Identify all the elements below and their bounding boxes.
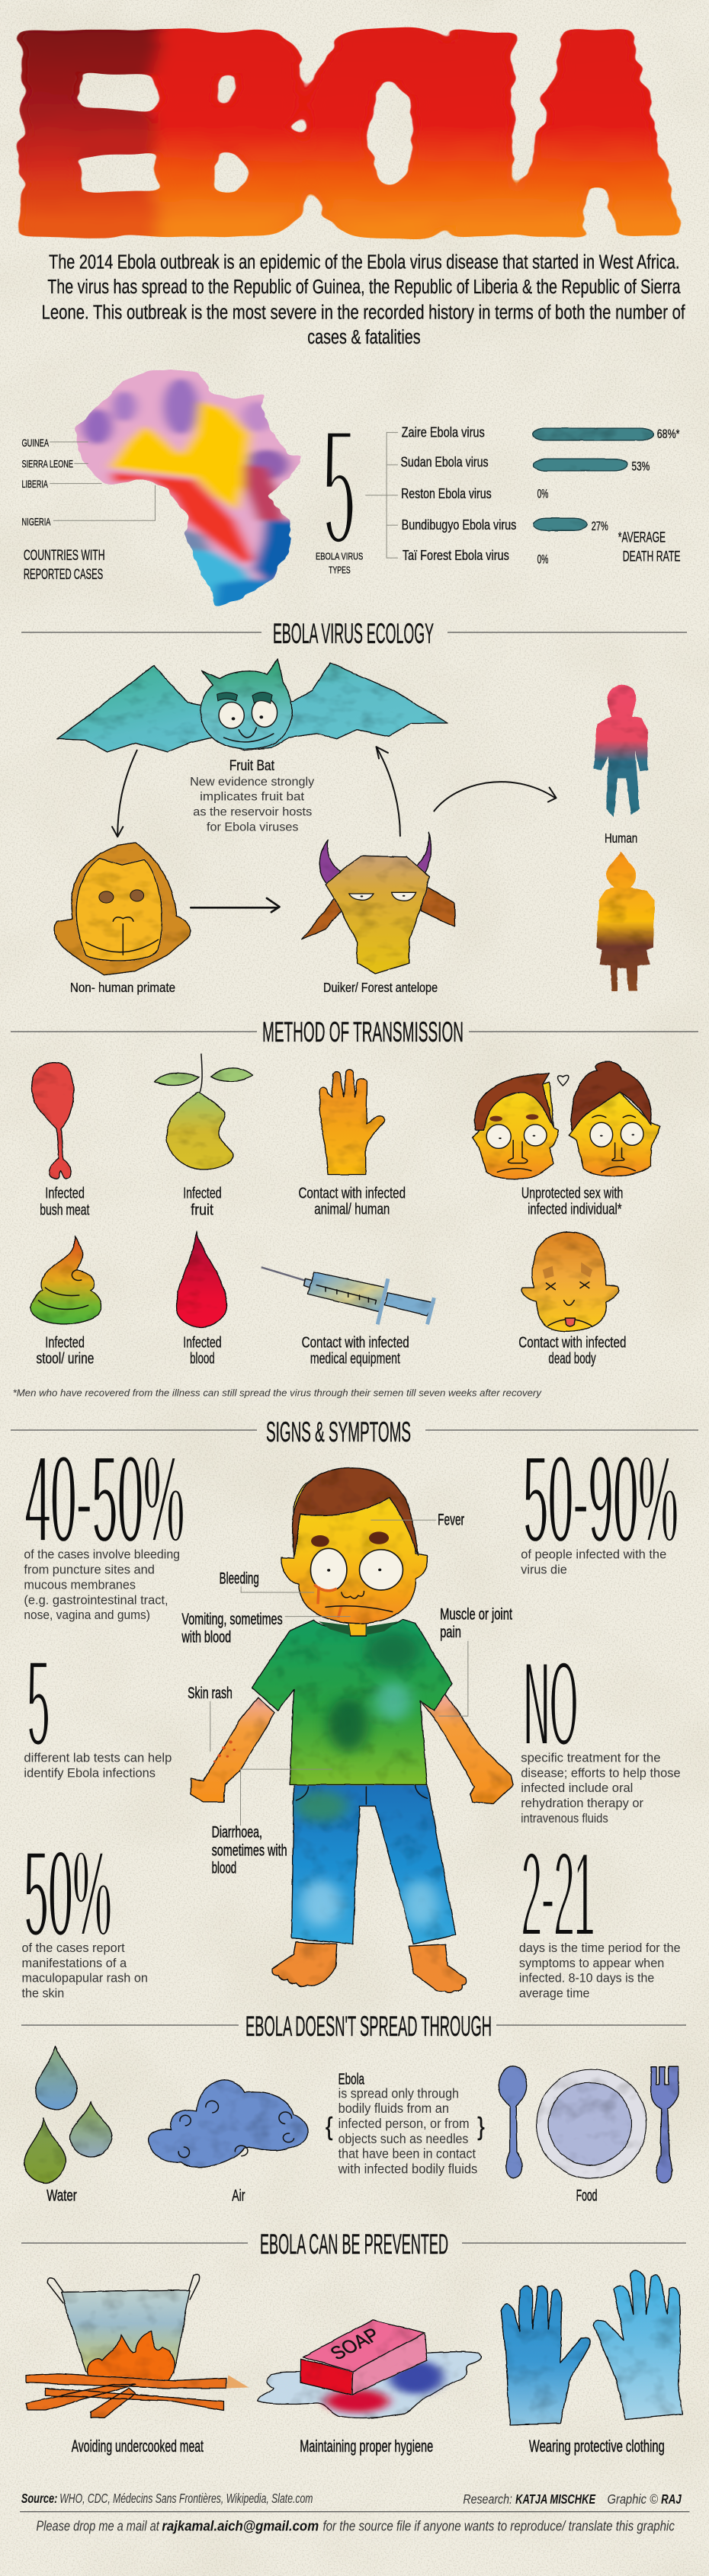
virus names: Zaire Ebola virus — [402, 424, 485, 440]
labels row one — [40, 1185, 623, 1218]
source credits: WHO, CDC, Médecins Sans Frontières, Wikipedia, Slate.com — [59, 2491, 313, 2506]
label: hygiene: Maintaining proper hygiene — [300, 2437, 433, 2456]
icon: blood drop — [176, 1231, 227, 1328]
virus names: Sudan Ebola virus — [400, 454, 489, 470]
panel: signs and symptoms — [21, 1429, 681, 2000]
icon: soap bar in puddle: SOAP — [326, 2324, 383, 2364]
icon: syringe — [261, 1267, 434, 1324]
intro text block: cases & fatalities — [307, 325, 421, 347]
heading: Ebola can be prevented: EBOLA CAN BE PREVENTED — [260, 2229, 448, 2260]
text block: how Ebola spreads: with infected bodily fluids — [338, 2162, 478, 2177]
death rate values: 53% — [632, 459, 650, 473]
big stat: 2-21 days: days is the time period for the — [519, 1940, 681, 1955]
death rate values: 27% — [592, 519, 608, 533]
icon: fruit bat — [56, 659, 448, 752]
big stat: NO treatment: disease; efforts to help those — [521, 1765, 681, 1780]
map labels and leader lines — [21, 437, 155, 528]
big stat: 50% rash: manifestations of a — [21, 1955, 127, 1970]
labels row two: Infected — [45, 1334, 85, 1351]
icon: human female figure — [596, 852, 655, 990]
virus names — [400, 424, 516, 563]
fruit bat caption — [190, 757, 315, 834]
icon: couple faces — [473, 1062, 660, 1179]
symptom callouts: sometimes with — [212, 1841, 287, 1859]
heading: method of transmission: METHOD OF TRANSMISSION — [262, 1016, 464, 1048]
source credits: RAJ — [661, 2492, 682, 2507]
symptom callouts: with blood — [181, 1627, 231, 1646]
labels row two: Infected — [183, 1334, 222, 1351]
symptom callouts — [181, 1510, 512, 1877]
big stat: 50% rash: the skin — [21, 1986, 64, 2000]
intro text block — [42, 251, 685, 347]
labels row one: Infected — [45, 1185, 85, 1202]
arrow: antelope to bat — [376, 747, 400, 836]
symptom callouts: Muscle or joint — [440, 1605, 512, 1623]
death rate values: 0% — [537, 552, 548, 566]
symptom callouts: Skin rash — [188, 1683, 233, 1701]
label: undercooked meat: Avoiding undercooked meat — [72, 2437, 204, 2456]
average death rate note — [618, 529, 681, 565]
death rate values — [537, 427, 679, 566]
panel: ecology cycle — [54, 659, 655, 995]
icon: soap bar in puddle — [258, 2320, 482, 2418]
label: air: Air — [232, 2187, 245, 2205]
icon: cloud — [149, 2080, 308, 2167]
big stat: NO treatment: specific treatment for the — [521, 1750, 661, 1765]
big stat: 40-50%: from puncture sites and — [24, 1562, 155, 1576]
text block: how Ebola spreads: infected person, or from — [338, 2117, 470, 2131]
death rate bars — [532, 428, 653, 530]
text block: how Ebola spreads: that have been in contact — [338, 2146, 476, 2162]
icon: human male figure — [594, 685, 648, 818]
source credits: Graphic © — [608, 2492, 658, 2507]
icon: bush meat — [31, 1063, 74, 1179]
panel: signs and symptoms: 50% — [24, 1824, 111, 1963]
panel: transmission icons — [13, 1054, 660, 1398]
hair — [293, 1468, 419, 1557]
panel: Africa map and virus types — [21, 370, 680, 606]
big stat: 5 lab tests: 5 — [27, 1634, 50, 1773]
big stat: 50-90%: of people infected with the — [521, 1547, 666, 1561]
label: water: Water — [47, 2187, 77, 2205]
source credits: Research: — [463, 2492, 512, 2507]
labels row two: dead body — [548, 1350, 596, 1367]
icon: non-human primate — [54, 843, 190, 975]
text block: how Ebola spreads: objects such as needles — [338, 2132, 469, 2147]
fruit bat caption: New evidence strongly — [190, 775, 315, 788]
labels row two: stool/ urine — [36, 1350, 94, 1367]
panel: signs and symptoms: 40-50% — [25, 1429, 184, 1570]
labels row one: Infected — [183, 1185, 222, 1202]
fruit bat caption: Fruit Bat — [229, 757, 274, 773]
big stat: 5 lab tests — [24, 1634, 172, 1780]
text block: how Ebola spreads — [326, 2070, 485, 2177]
panel: ecology cycle: Human — [605, 831, 637, 846]
source credits: Source: — [21, 2491, 57, 2506]
map of Africa — [75, 370, 301, 606]
map labels and leader lines: SIERRA LEONE — [21, 459, 73, 470]
panel: Africa map and virus types: Taï Forest Ebola virus — [403, 547, 509, 563]
icon: dead body face — [521, 1232, 618, 1331]
big stat: 40-50%: (e.g. gastrointestinal tract, — [24, 1592, 168, 1607]
big stat: NO treatment — [521, 1635, 681, 1826]
panel: Africa map and virus types: EBOLA VIRUS — [316, 551, 363, 562]
icon: pot over fire — [26, 2274, 249, 2418]
text block: how Ebola spreads: } — [477, 2112, 485, 2140]
big stat: NO treatment: infected include oral — [521, 1781, 633, 1795]
labels row one: animal/ human — [314, 1201, 390, 1218]
big stat: NO treatment: intravenous fluids — [521, 1810, 608, 1826]
arrow: primate to antelope — [191, 898, 280, 912]
labels row two: blood — [190, 1350, 215, 1367]
big stat: NO treatment: rehydration therapy or — [521, 1795, 643, 1810]
big number 5: virus types — [316, 392, 363, 581]
big stat: 50% rash — [21, 1824, 148, 2000]
big stat: 40-50%: of the cases involve bleeding — [24, 1547, 180, 1561]
panel: ecology cycle: Duiker/ Forest antelope — [323, 981, 438, 995]
icon: infected fruit — [155, 1054, 253, 1170]
symptom callouts: blood — [212, 1858, 236, 1877]
text block: how Ebola spreads: { — [326, 2112, 333, 2140]
contact note: rajkamal.aich@gmail.com — [162, 2518, 319, 2534]
contact note — [36, 2518, 675, 2534]
labels row two: medical equipment — [310, 1350, 400, 1367]
big stat: 2-21 days — [519, 1826, 681, 2000]
big stat: 2-21 days: average time — [519, 1986, 589, 2000]
labels row two — [36, 1334, 626, 1367]
big stat: 50% rash: maculopapular rash on — [21, 1970, 148, 1985]
icon: duiker antelope — [302, 832, 455, 974]
fruit bat caption: for Ebola viruses — [207, 820, 298, 834]
panel: spread and prevention: Food — [576, 2187, 597, 2205]
panel: Africa map and virus types: Bundibugyo Ebola virus — [402, 517, 516, 533]
text block: how Ebola spreads: is spread only through — [338, 2086, 459, 2101]
labels: primate and antelope: Non- human primate — [70, 981, 175, 995]
big stat: 5 lab tests: different lab tests can help — [24, 1750, 172, 1765]
death rate values: 0% — [537, 487, 548, 501]
map caption — [24, 547, 105, 582]
arrow: antelope to human — [434, 782, 557, 811]
arrow: bat to primate — [112, 750, 137, 837]
symptom callouts: Fever — [438, 1510, 464, 1528]
big stat: 40-50% — [24, 1429, 184, 1622]
symptom callouts: Bleeding — [220, 1569, 259, 1587]
panel: Africa map and virus types: COUNTRIES WITH — [24, 547, 105, 563]
icon: spoon, plate and fork — [499, 2066, 679, 2183]
big stat: 5 lab tests: identify Ebola infections — [24, 1765, 156, 1780]
eyes and face details — [310, 1531, 403, 1618]
contact note: Please drop me a mail at — [36, 2518, 160, 2534]
map labels and leader lines: LIBERIA — [21, 478, 48, 490]
virus names: Reston Ebola virus — [401, 485, 492, 501]
fruit bat caption: as the reservoir hosts — [193, 805, 312, 818]
symptom callouts: pain — [440, 1623, 461, 1641]
text block: how Ebola spreads: bodily fluids from an — [338, 2101, 449, 2116]
feet — [272, 1942, 467, 1993]
icon: hand — [319, 1070, 384, 1175]
arms — [191, 1694, 513, 1804]
panel: Africa map and virus types: REPORTED CASES — [24, 566, 103, 582]
symptom callouts: Vomiting, sometimes — [181, 1609, 283, 1627]
icon: water drops — [24, 2046, 112, 2183]
labels row one: Contact with infected — [298, 1185, 406, 1202]
labels row one: bush meat — [40, 1202, 89, 1218]
source credits — [20, 2491, 689, 2512]
big stat: 50% rash: of the cases report — [21, 1940, 125, 1955]
big stat: 2-21 days: symptoms to appear when — [519, 1955, 664, 1970]
labels row one: fruit — [191, 1202, 213, 1218]
trousers — [292, 1785, 456, 1944]
big stat: 40-50%: nose, vagina and gums) — [24, 1608, 150, 1622]
panel: Africa map and virus types: 5 — [323, 392, 355, 581]
virus type bracket — [365, 433, 398, 558]
big number 5: virus types: TYPES — [329, 565, 351, 576]
heading: signs and symptoms: SIGNS & SYMPTOMS — [266, 1416, 411, 1448]
big stat: 40-50%: mucous membranes — [24, 1577, 136, 1592]
illustration: sick boy — [191, 1468, 513, 1993]
symptom callouts: Diarrhoea, — [212, 1822, 262, 1841]
heading: Ebola virus ecology: EBOLA VIRUS ECOLOGY — [273, 618, 434, 649]
icon: infected stool — [30, 1237, 101, 1324]
source credits: KATJA MISCHKE — [515, 2492, 596, 2507]
labels row two: Contact with infected — [302, 1334, 409, 1351]
map labels and leader lines: NIGERIA — [21, 517, 51, 528]
fruit bat caption: implicates fruit bat — [200, 790, 305, 803]
labels: primate and antelope — [70, 981, 438, 995]
big stat: 50-90%: virus die — [521, 1562, 567, 1576]
big stat: 2-21 days: infected. 8-10 days is the — [519, 1970, 654, 1985]
map labels and leader lines: GUINEA — [21, 437, 49, 449]
icon: protective gloves — [501, 2270, 683, 2425]
head — [281, 1468, 428, 1624]
text block: how Ebola spreads: Ebola — [338, 2070, 364, 2088]
shirt — [252, 1620, 452, 1785]
panel: spread and prevention — [20, 2046, 689, 2534]
